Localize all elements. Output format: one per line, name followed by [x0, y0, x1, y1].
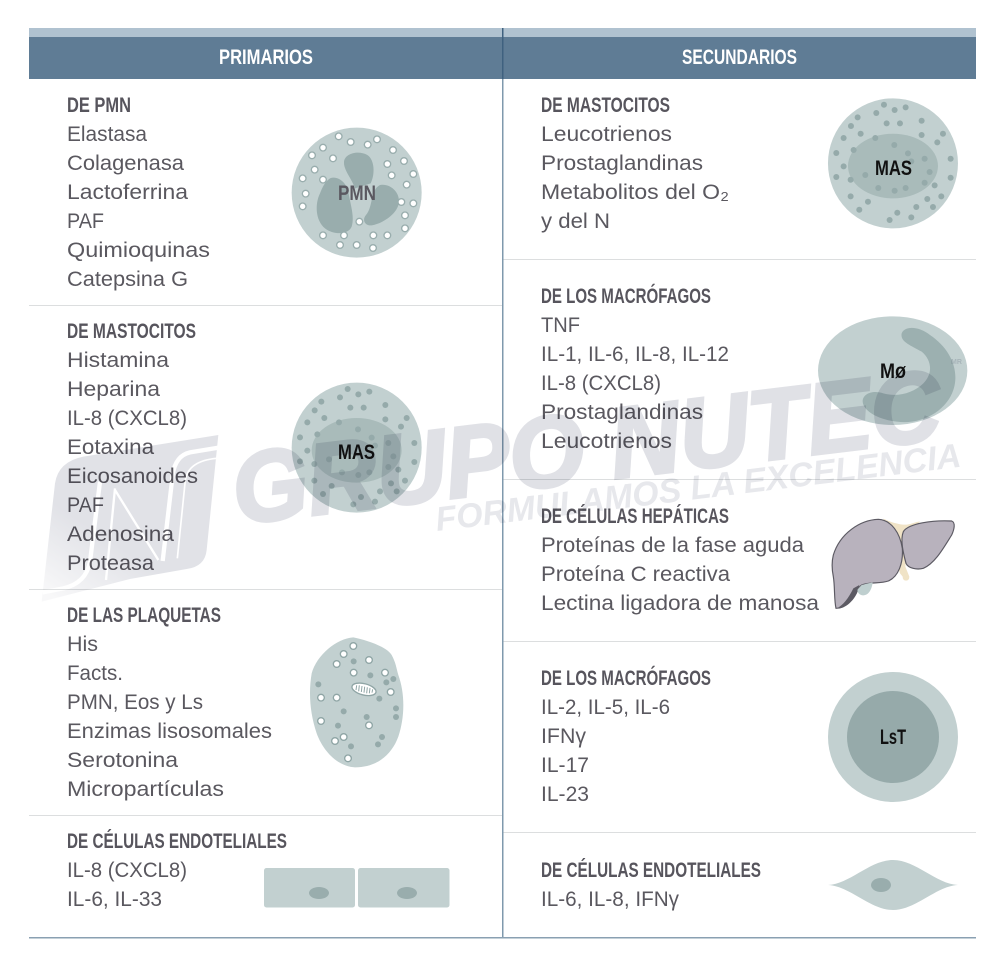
list: de mastocitos: Histamina — [67, 348, 169, 372]
cell label: MAS: MAS — [338, 441, 375, 464]
list: de mastocitos: Proteasa — [67, 551, 154, 575]
list: de las plaquetas: Facts. — [67, 661, 123, 685]
heading: de células endoteliales: DE CÉLULAS ENDOTELIALES — [67, 830, 287, 853]
cell label: LsT: LsT — [880, 726, 906, 749]
list: de mastocitos: Eotaxina — [67, 435, 154, 459]
icon: liver — [832, 519, 954, 608]
heading: de los macrófagos: DE LOS MACRÓFAGOS — [541, 284, 711, 308]
list: de los macrófagos: IL-23 — [541, 782, 589, 806]
icon: mast cell — [292, 383, 422, 513]
list: de las plaquetas — [67, 632, 272, 801]
list: de los macrófagos: IL-17 — [541, 753, 589, 777]
list: de mastocitos: Prostaglandinas — [541, 151, 703, 175]
heading: de los macrófagos: DE LOS MACRÓFAGOS — [541, 666, 711, 690]
list: de los macrófagos — [541, 695, 670, 806]
icon: endothelial cells — [264, 868, 450, 908]
list: de los macrófagos: IL-1, IL-6, IL-8, IL-12 — [541, 342, 729, 366]
heading: de células hepáticas: DE CÉLULAS HEPÁTICAS — [541, 505, 729, 528]
heading: de PMN: DE PMN — [67, 94, 131, 117]
list: de células endoteliales — [67, 858, 187, 911]
list: de las plaquetas: Serotonina — [67, 748, 178, 772]
list: de PMN: Elastasa — [67, 122, 147, 146]
list: de los macrófagos: Prostaglandinas — [541, 400, 703, 424]
list: de mastocitos: Heparina — [67, 377, 160, 401]
list: de PMN: PAF — [67, 209, 104, 233]
list: de mastocitos: PAF — [67, 493, 104, 517]
list: de mastocitos: Metabolitos del O₂ — [541, 180, 729, 204]
list: de células endoteliales: IL-8 (CXCL8) — [67, 858, 187, 882]
watermark registered mark: MR — [951, 359, 962, 366]
list: de mastocitos: IL-8 (CXCL8) — [67, 406, 187, 430]
list: de los macrófagos: TNF — [541, 313, 580, 337]
list: de mastocitos: y del N — [541, 209, 610, 233]
list: de células hepáticas: Lectina ligadora de manosa — [541, 591, 819, 615]
panel: de mastocitos (secundarios) — [541, 94, 958, 233]
watermark tagline: FORMULAMOS LA EXCELENCIA — [433, 437, 963, 539]
cell label: MAS: MAS — [875, 157, 912, 180]
list: de los macrófagos — [541, 313, 729, 453]
list: de mastocitos — [541, 122, 729, 233]
list: de mastocitos: Adenosina — [67, 522, 174, 546]
icon: mast cell — [828, 98, 958, 228]
watermark: Grupo Nutec — [42, 349, 963, 602]
heading: de las plaquetas: DE LAS PLAQUETAS — [67, 604, 221, 627]
panel: de PMN — [67, 94, 422, 291]
list: de los macrófagos: Leucotrienos — [541, 429, 672, 453]
heading: secundarios: SECUNDARIOS — [682, 46, 797, 69]
panel: de mastocitos (primarios) — [67, 320, 422, 575]
list: de mastocitos — [67, 348, 198, 575]
list: de las plaquetas: Enzimas lisosomales — [67, 719, 272, 743]
panel: de las plaquetas — [67, 604, 403, 801]
icon: PMN cell — [292, 128, 422, 258]
list: de PMN: Quimioquinas — [67, 238, 210, 262]
watermark logo — [42, 435, 219, 602]
list: de PMN: Catepsina G — [67, 267, 188, 291]
heading: de mastocitos: DE MASTOCITOS — [541, 94, 670, 117]
list: de mastocitos: Eicosanoides — [67, 464, 198, 488]
panel: de células endoteliales (primarios) — [67, 830, 450, 911]
list: de los macrófagos: IL-8 (CXCL8) — [541, 371, 661, 395]
cell label: Mø: Mø — [880, 360, 906, 383]
mitochondrion — [351, 681, 377, 698]
list: de células hepáticas: Proteínas de la fase aguda — [541, 533, 804, 557]
list: de células endoteliales: IL-6, IL-8, IFNγ — [541, 887, 679, 911]
panel: de los macrófagos (1) — [541, 284, 967, 453]
list: de los macrófagos: IL-2, IL-5, IL-6 — [541, 695, 670, 719]
list: de mastocitos: Leucotrienos — [541, 122, 672, 146]
list: de las plaquetas: His — [67, 632, 98, 656]
table header: primarios — [29, 28, 503, 79]
list: de PMN: Lactoferrina — [67, 180, 188, 204]
icon: macrophage — [818, 316, 967, 425]
list: de PMN: Colagenasa — [67, 151, 184, 175]
heading: primarios: PRIMARIOS — [219, 46, 313, 69]
list: de PMN — [67, 122, 210, 291]
heading: de células endoteliales: DE CÉLULAS ENDOTELIALES — [541, 859, 761, 882]
list: de los macrófagos: IFNγ — [541, 724, 586, 748]
list: de células endoteliales: IL-6, IL-33 — [67, 887, 162, 911]
list: de las plaquetas: PMN, Eos y Ls — [67, 690, 203, 714]
list: de células hepáticas: Proteína C reactiva — [541, 562, 730, 586]
panel: de células endoteliales (secundarios) — [541, 859, 958, 911]
icon: platelet — [310, 637, 403, 767]
list: de células hepáticas — [541, 533, 819, 615]
list: de las plaquetas: Micropartículas — [67, 777, 224, 801]
icon: spindle endothelial cell — [828, 860, 958, 910]
panel: de células hepáticas — [541, 505, 954, 615]
watermark wordmark: GRUPO NUTEC — [226, 349, 948, 546]
heading: de mastocitos: DE MASTOCITOS — [67, 320, 196, 343]
panel: de los macrófagos (2) — [541, 666, 958, 806]
icon: T lymphocyte — [828, 672, 958, 802]
table header: secundarios — [503, 28, 976, 79]
cell label: PMN: PMN — [338, 182, 376, 205]
